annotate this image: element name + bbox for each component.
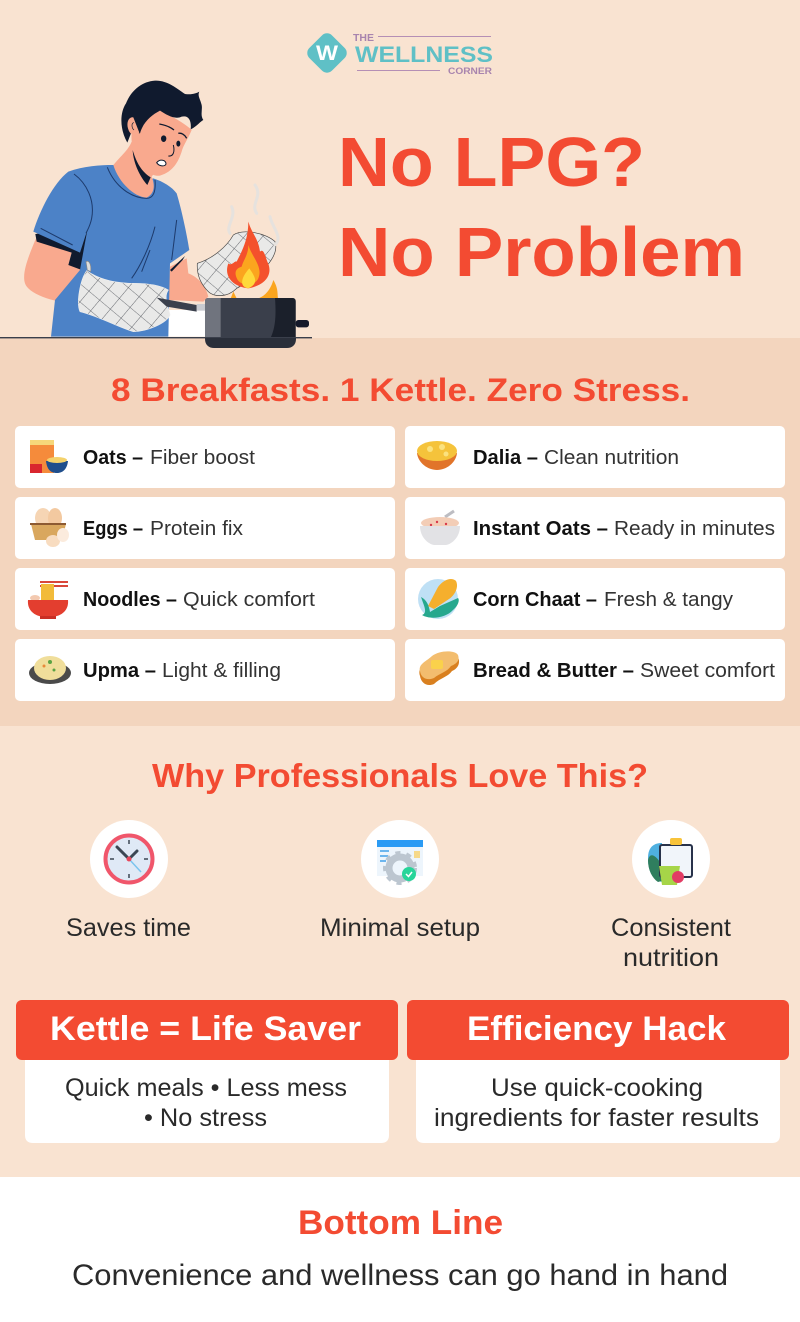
item: dalia xyxy=(405,426,785,488)
panel: bottom line: Bottom Line xyxy=(298,1204,503,1242)
title xyxy=(338,123,745,291)
illustration: worried man cooking over flaming pot xyxy=(24,81,309,348)
panel: kettle life saver xyxy=(16,1000,398,1143)
benefit: saves time: Saves time xyxy=(66,914,191,942)
item: instant oats: Instant Oats – xyxy=(473,518,608,540)
item: corn chaat: Fresh & tangy xyxy=(604,589,733,611)
benefit: consistent nutrition: nutrition xyxy=(623,944,719,972)
item: dalia: Clean nutrition xyxy=(544,447,679,469)
panel: kettle life saver: Quick meals • Less mess xyxy=(65,1074,347,1102)
item: upma: Upma – xyxy=(83,660,156,682)
logo: The Wellness Corner: THE xyxy=(353,33,374,44)
logo: The Wellness Corner xyxy=(304,30,493,76)
panel: kettle life saver: • No stress xyxy=(144,1104,267,1132)
item: corn chaat: Corn Chaat – xyxy=(473,589,597,611)
item: eggs xyxy=(15,497,395,559)
title: No LPG? xyxy=(338,123,645,201)
panel: efficiency hack xyxy=(407,1000,789,1143)
item: eggs: Eggs – xyxy=(83,518,143,540)
item: instant oats xyxy=(405,497,785,559)
panel: eight breakfasts xyxy=(0,337,800,726)
item: noodles: Noodles – xyxy=(83,589,177,611)
pot base over panel xyxy=(205,338,296,348)
logo: The Wellness Corner: W xyxy=(316,42,338,65)
benefit: minimal setup: Minimal setup xyxy=(320,914,480,942)
item: bread and butter: Bread & Butter – xyxy=(473,660,634,682)
item: bread and butter: Sweet comfort xyxy=(640,660,775,682)
item: noodles xyxy=(15,568,395,630)
logo: The Wellness Corner: WELLNESS xyxy=(355,42,493,67)
item: noodles: Quick comfort xyxy=(183,589,315,611)
benefit: consistent nutrition xyxy=(611,820,731,972)
panel: bottom line xyxy=(0,1177,800,1322)
logo: The Wellness Corner: CORNER xyxy=(448,66,493,76)
item: bread and butter xyxy=(405,639,785,701)
panel: bottom line: Convenience and wellness can go hand in hand xyxy=(72,1259,728,1292)
benefit: saves time xyxy=(66,820,191,942)
item: corn chaat xyxy=(405,568,785,630)
item: oats: Fiber boost xyxy=(150,447,255,469)
item: dalia: Dalia – xyxy=(473,447,538,469)
panel: efficiency hack: ingredients for faster results xyxy=(434,1104,759,1132)
item: upma: Light & filling xyxy=(162,660,281,682)
heading: 8 breakfasts: 8 Breakfasts. 1 Kettle. Zero Stress. xyxy=(111,372,690,408)
item: instant oats: Ready in minutes xyxy=(614,518,775,540)
panel: kettle life saver: Kettle = Life Saver xyxy=(50,1010,361,1048)
benefit: minimal setup xyxy=(320,820,480,942)
item: upma xyxy=(15,639,395,701)
item: oats xyxy=(15,426,395,488)
benefit: consistent nutrition: Consistent xyxy=(611,914,731,942)
panel: efficiency hack: Efficiency Hack xyxy=(467,1010,726,1048)
item: eggs: Protein fix xyxy=(150,518,243,540)
title: No Problem xyxy=(338,213,745,291)
panel: efficiency hack: Use quick-cooking xyxy=(491,1074,703,1102)
item: oats: Oats – xyxy=(83,447,143,469)
heading: why professionals love this: Why Professionals Love This? xyxy=(152,757,648,794)
